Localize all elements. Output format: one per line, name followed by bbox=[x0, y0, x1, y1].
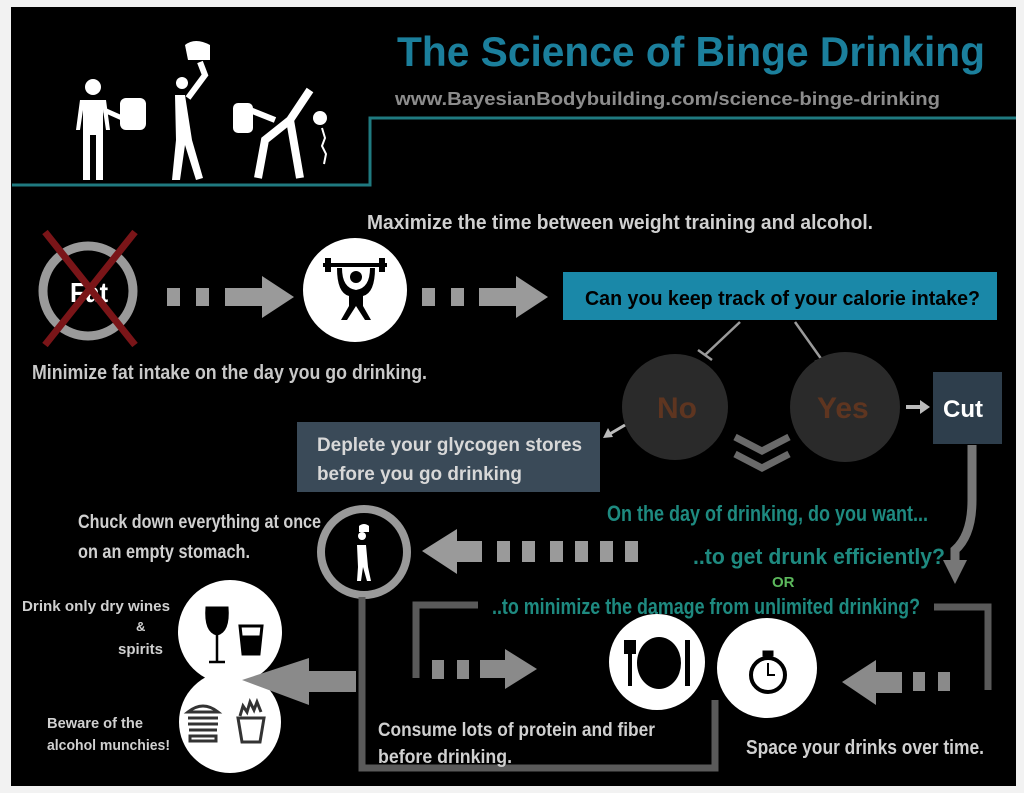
text: chuck down: Chuck down everything at once bbox=[78, 512, 321, 533]
circle: Yes bbox=[790, 352, 900, 462]
arrow: no to deplete bbox=[603, 425, 625, 438]
box: deplete: Deplete your glycogen stores bbox=[317, 435, 582, 456]
question: day of drinking: On the day of drinking, do you want... bbox=[607, 501, 928, 526]
text: munchies bbox=[47, 715, 170, 754]
arrow: curved from cut bbox=[943, 445, 972, 584]
circle: No: No bbox=[657, 392, 697, 425]
text: dry wines: Drink only dry wines bbox=[22, 598, 170, 615]
arrow 2 bbox=[422, 276, 548, 318]
arrow: from right bbox=[842, 660, 950, 705]
text: minimize fat: Minimize fat intake on the day you go drinking. bbox=[32, 362, 427, 384]
icon: fat crossed bbox=[43, 232, 135, 345]
icon: fat crossed: Fat bbox=[70, 277, 108, 308]
box: cut bbox=[933, 372, 1002, 444]
icon: stopwatch bbox=[717, 618, 817, 718]
text: dry wines: & bbox=[136, 619, 145, 634]
text: protein fiber bbox=[378, 720, 656, 768]
bracket lines bbox=[362, 597, 988, 768]
circle: No bbox=[622, 354, 728, 460]
heading: maximize time: Maximize the time between weight training and alcohol. bbox=[367, 212, 873, 234]
box: deplete: before you go drinking bbox=[317, 464, 522, 485]
text: space drinks: Space your drinks over time. bbox=[746, 737, 984, 759]
text: chuck down bbox=[78, 512, 321, 563]
box: cut: Cut bbox=[943, 396, 983, 423]
icon: chugging figure bbox=[321, 509, 407, 595]
text: protein fiber: before drinking. bbox=[378, 747, 512, 768]
arrow: big left bbox=[242, 658, 356, 705]
icon: weightlifter bbox=[303, 238, 407, 342]
icon: plate bbox=[609, 614, 705, 710]
text: munchies: Beware of the bbox=[47, 715, 143, 732]
icon: wine bbox=[178, 580, 282, 684]
box: calorie question bbox=[563, 272, 997, 320]
chevrons bbox=[735, 437, 789, 468]
option: drunk efficiently: ..to get drunk efficiently? bbox=[693, 544, 945, 569]
text: chuck down: on an empty stomach. bbox=[78, 542, 250, 563]
or: OR bbox=[772, 574, 795, 591]
arrow: to plate bbox=[432, 649, 537, 689]
arrow 1 bbox=[167, 276, 294, 318]
title: The Science of Binge Drinking bbox=[397, 28, 985, 75]
box: deplete bbox=[297, 422, 600, 492]
text: dry wines: spirits bbox=[118, 641, 163, 658]
icon: drinking figures bbox=[76, 41, 327, 180]
text: munchies: alcohol munchies! bbox=[47, 737, 170, 754]
arrow: left dashed bbox=[422, 529, 638, 574]
url: www.BayesianBodybuilding.com/science-binge-drinking bbox=[394, 89, 940, 109]
text: protein fiber: Consume lots of protein and fiber bbox=[378, 720, 656, 741]
text: dry wines bbox=[22, 598, 170, 658]
option: minimize damage: ..to minimize the damage from unlimited drinking? bbox=[492, 594, 920, 619]
box: calorie question: Can you keep track of your calorie intake? bbox=[585, 288, 980, 310]
icon: munchies bbox=[179, 671, 281, 773]
circle: Yes: Yes bbox=[817, 392, 869, 425]
arrow to cut bbox=[906, 400, 930, 414]
